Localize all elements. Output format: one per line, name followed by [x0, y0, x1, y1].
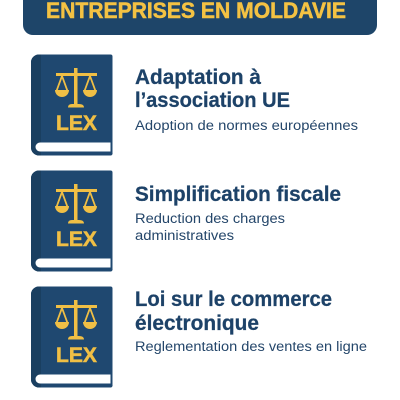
- item 2: Simplification: [31, 170, 341, 272]
- icon: law book 3: LEX: [56, 344, 97, 367]
- description line 1: Reduction des charges: [135, 211, 285, 226]
- icon: law book 1: [31, 54, 113, 156]
- header banner: [23, 0, 377, 35]
- icon: law book 2: LEX: [56, 228, 97, 251]
- icon: law book 2: [31, 170, 113, 272]
- heading line 2: l’association UE: [135, 89, 290, 112]
- item 3: Commerce: [31, 286, 367, 388]
- description: Reglementation des ventes en ligne: [135, 339, 367, 354]
- heading: Loi sur le commerce: [135, 288, 332, 311]
- description line 2: administratives: [135, 228, 234, 243]
- icon: law book 3: [31, 286, 113, 388]
- heading: Simplification fiscale: [135, 183, 341, 206]
- description: Adoption de normes européennes: [135, 118, 358, 133]
- heading line 2: électronique: [135, 312, 259, 335]
- item 1: Adaptation: [31, 54, 358, 156]
- icon: law book 1: LEX: [56, 112, 97, 135]
- heading: Adaptation à: [135, 66, 261, 89]
